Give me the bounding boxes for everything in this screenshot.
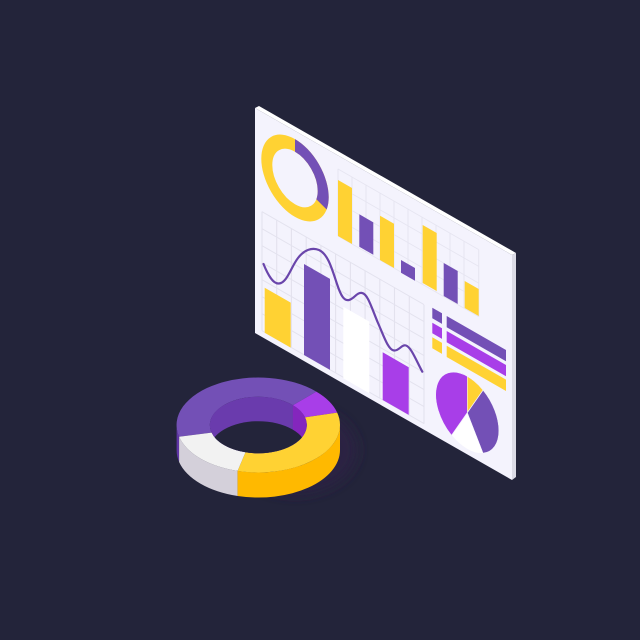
shadow under donut bbox=[233, 406, 357, 494]
board top edge bbox=[255, 106, 516, 255]
panel: dashboard board bbox=[255, 106, 516, 480]
board front face bbox=[255, 108, 512, 480]
3D donut chart bbox=[177, 378, 340, 498]
donut top: yellow bbox=[238, 413, 340, 472]
pie chart bbox=[436, 358, 499, 467]
ring chart bbox=[267, 129, 323, 227]
donut outer side: purple bbox=[177, 425, 179, 462]
donut top: bright purple bbox=[293, 392, 337, 417]
trend line bbox=[264, 249, 422, 372]
legend list bbox=[432, 308, 506, 391]
board side edge bbox=[512, 253, 516, 480]
donut outer side: grey bbox=[179, 437, 238, 496]
donut top: purple bbox=[177, 378, 316, 437]
upper bar chart bbox=[338, 169, 479, 317]
donut outer side: yellow bbox=[238, 425, 340, 498]
donut top: white bbox=[179, 433, 246, 471]
lower bar and line chart bbox=[262, 212, 424, 424]
donut hole bbox=[210, 396, 307, 454]
